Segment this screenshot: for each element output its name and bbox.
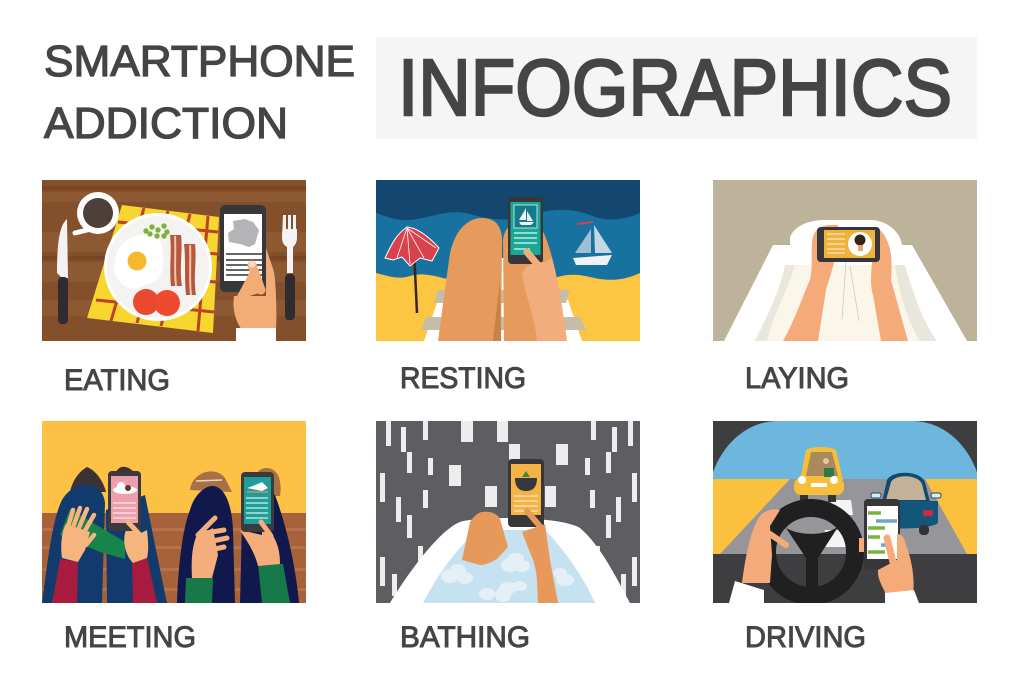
panel: meeting xyxy=(42,421,306,603)
phone: article xyxy=(220,205,266,292)
panel: driving xyxy=(713,421,977,603)
bed and pillow xyxy=(724,220,967,341)
icon: fork xyxy=(282,215,297,320)
heading: infographics banner: INFOGRAPHICS xyxy=(398,43,952,132)
napkin xyxy=(87,205,219,333)
label: eating: EATING xyxy=(64,364,170,397)
green folder xyxy=(60,509,125,559)
left pair hands and sleeves xyxy=(52,508,157,603)
icon: sailboat xyxy=(573,222,612,265)
phone: cake app xyxy=(108,471,141,531)
title: smartphone addiction xyxy=(44,37,355,148)
arm xyxy=(522,524,558,603)
hand holding phone xyxy=(522,252,567,341)
fingers on phone xyxy=(527,511,543,530)
person right, navy hair xyxy=(177,468,299,603)
hand holding phone xyxy=(233,248,276,341)
label: resting: RESTING xyxy=(400,362,526,395)
phone: profile app xyxy=(817,227,880,262)
icon: beach umbrella xyxy=(385,227,439,313)
yellow car xyxy=(794,447,844,502)
title: smartphone addiction: ADDICTION xyxy=(44,99,288,148)
phone: shoes app xyxy=(241,472,274,532)
blue car xyxy=(868,473,941,535)
arms and hands xyxy=(783,225,908,341)
person left, dark blue hair xyxy=(42,467,167,603)
steering wheel xyxy=(767,508,855,603)
panel: eating xyxy=(42,180,306,341)
right hand and cuff xyxy=(859,534,919,603)
label: bathing: BATHING xyxy=(400,621,530,654)
legs xyxy=(438,218,567,341)
icon: knife xyxy=(57,219,68,324)
finger on shoes phone xyxy=(261,522,271,536)
panel: resting xyxy=(376,180,640,341)
bathtub with water xyxy=(390,518,630,603)
label: meeting: MEETING xyxy=(64,621,196,654)
panel: bathing xyxy=(376,421,640,603)
phone: sailing app xyxy=(508,197,543,264)
finger on cake phone xyxy=(128,522,139,534)
building windows xyxy=(380,421,637,596)
label: laying: LAYING xyxy=(745,362,849,395)
phone: messaging app xyxy=(864,499,900,569)
title: smartphone addiction: SMARTPHONE xyxy=(44,37,355,86)
foam bubbles xyxy=(441,553,574,602)
towel xyxy=(421,258,586,341)
left hand and cuff xyxy=(729,509,786,603)
phone: food app xyxy=(508,459,544,527)
plate with breakfast xyxy=(104,213,212,321)
panel: laying xyxy=(713,180,977,341)
fields and road xyxy=(713,479,977,603)
thin sheet folds xyxy=(842,262,859,321)
windshield sky xyxy=(713,421,977,479)
icon: coffee cup xyxy=(75,192,119,234)
knee xyxy=(462,512,508,565)
right pair hands and sleeves xyxy=(185,518,290,603)
label: driving: DRIVING xyxy=(745,621,866,654)
